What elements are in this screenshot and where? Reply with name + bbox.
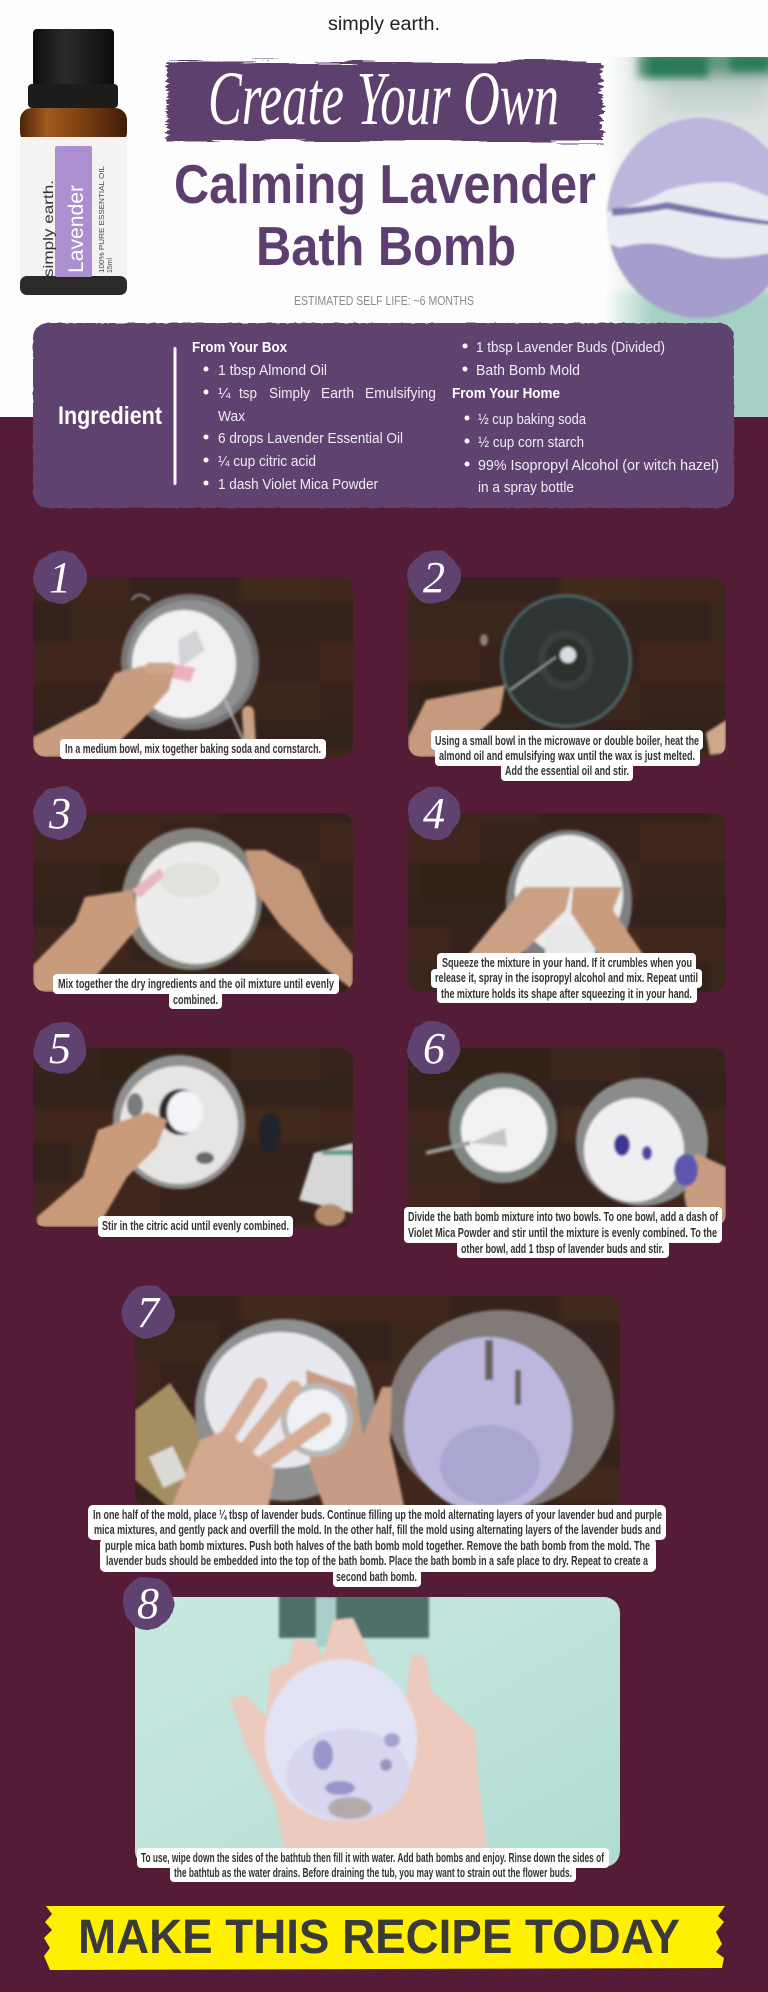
list: from your home: 99% Isopropyl Alcohol (or witch hazel) bbox=[478, 457, 719, 474]
call to action banner: MAKE THIS RECIPE TODAY bbox=[78, 1911, 680, 1964]
list: from your home bbox=[452, 385, 719, 496]
step 5 bbox=[23, 1022, 363, 1237]
caption 5: Stir in the citric acid until evenly combined. bbox=[102, 1219, 289, 1233]
heading: Calming Lavender Bath Bomb bbox=[174, 153, 596, 277]
caption 5 bbox=[98, 1216, 293, 1237]
caption 3: Mix together the dry ingredients and the oil mixture until evenly bbox=[58, 977, 334, 991]
step 4 bbox=[398, 786, 736, 1003]
number badge 6 bbox=[408, 1022, 460, 1074]
heading: Calming Lavender Bath Bomb: Calming Lavender bbox=[174, 153, 596, 215]
list: from your home: in a spray bottle bbox=[478, 479, 574, 496]
heading: Calming Lavender Bath Bomb: Bath Bomb bbox=[256, 215, 516, 277]
icon: lavender essential oil bottle: 15ml bbox=[105, 258, 114, 273]
icon: lavender essential oil bottle: Lavender bbox=[65, 185, 88, 273]
caption 7: second bath bomb. bbox=[336, 1570, 417, 1584]
step 7 bbox=[88, 1286, 666, 1587]
caption 6 bbox=[404, 1207, 722, 1258]
caption 8 bbox=[137, 1848, 609, 1882]
shelf life note: ESTIMATED SELF LIFE: ~6 MONTHS bbox=[294, 294, 474, 308]
list: from your box: ¼ bbox=[218, 385, 231, 402]
list: from your box: 1 tbsp Lavender Buds (Divided) bbox=[476, 339, 665, 356]
number badge 7 bbox=[122, 1286, 174, 1338]
photo: squeezing the mixture bbox=[408, 813, 726, 992]
caption 1 bbox=[60, 739, 326, 759]
title banner: Create Your Own bbox=[167, 57, 602, 141]
list: from your box: From Your Box bbox=[192, 339, 288, 356]
list: from your box bbox=[192, 339, 665, 493]
photo: bath bomb on towel bbox=[606, 57, 768, 417]
number badge 8 bbox=[122, 1576, 174, 1630]
list: from your home: From Your Home bbox=[452, 385, 560, 402]
caption 3 bbox=[53, 974, 339, 1009]
number badge 8: 8 bbox=[137, 1579, 159, 1628]
header white background bbox=[0, 0, 768, 417]
list: from your box: ¼ cup citric acid bbox=[218, 453, 316, 470]
caption 2: Add the essential oil and stir. bbox=[505, 764, 629, 778]
icon: lavender essential oil bottle: 100% PURE ESSENTIAL OIL bbox=[97, 166, 106, 273]
list: from your box: Simply bbox=[269, 385, 310, 402]
photo: heating oil and wax in glass bowl bbox=[408, 577, 726, 757]
list: from your home: ½ cup corn starch bbox=[478, 434, 584, 451]
step 6 bbox=[398, 1022, 736, 1258]
number badge 2: 2 bbox=[423, 553, 445, 602]
photo: stirring in citric acid bbox=[33, 1048, 353, 1227]
list: from your box: tsp bbox=[239, 385, 257, 402]
title banner: Create Your Own: Create Your Own bbox=[208, 57, 559, 141]
step 3 bbox=[23, 786, 363, 1009]
logo: simply earth: simply earth. bbox=[328, 14, 440, 35]
number badge 7: 7 bbox=[137, 1288, 161, 1337]
number badge 5: 5 bbox=[49, 1024, 71, 1073]
number badge 6: 6 bbox=[423, 1024, 445, 1073]
list: from your home: ½ cup baking soda bbox=[478, 411, 587, 428]
photo: two bowls, whisk and mica powder bbox=[408, 1048, 726, 1224]
list: from your box: 1 dash Violet Mica Powder bbox=[218, 476, 378, 493]
list: from your box: Wax bbox=[218, 408, 245, 425]
photo: filling the mold bbox=[135, 1296, 620, 1505]
step 1 bbox=[23, 550, 363, 767]
number badge 1: 1 bbox=[49, 553, 71, 602]
caption 2 bbox=[431, 730, 703, 781]
step 2 bbox=[398, 550, 736, 781]
number badge 2 bbox=[408, 550, 460, 604]
icon: lavender essential oil bottle bbox=[20, 29, 127, 295]
number badge 5 bbox=[34, 1022, 86, 1074]
caption 8: the bathtub as the water drains. Before draining the tub, you may want to strain out the flower buds. bbox=[174, 1866, 572, 1880]
panel: ingredients bbox=[33, 323, 734, 508]
list: from your box: 6 drops Lavender Essential Oil bbox=[218, 430, 403, 447]
number badge 3 bbox=[34, 786, 86, 840]
photo: mixing powder in bowl bbox=[33, 577, 353, 757]
number badge 4: 4 bbox=[423, 789, 445, 838]
list: from your box: Earth bbox=[321, 385, 354, 402]
list: from your box: Bath Bomb Mold bbox=[476, 362, 580, 379]
number badge 1 bbox=[34, 550, 86, 604]
caption 3: combined. bbox=[173, 993, 218, 1007]
caption 1: In a medium bowl, mix together baking soda and cornstarch. bbox=[65, 742, 321, 756]
caption 4 bbox=[431, 953, 702, 1003]
icon: lavender essential oil bottle: simply earth. bbox=[40, 180, 56, 277]
ingredients label: Ingredient bbox=[58, 402, 163, 430]
step 8 bbox=[122, 1576, 620, 1882]
list: from your box: Emulsifying bbox=[365, 385, 436, 402]
number badge 3: 3 bbox=[48, 789, 71, 838]
list: from your box: 1 tbsp Almond Oil bbox=[218, 362, 327, 379]
number badge 4 bbox=[408, 786, 460, 840]
photo: mixing dry ingredients and oil bbox=[33, 813, 353, 992]
photo: fizzing bath bomb in hand bbox=[135, 1590, 620, 1870]
caption 6: other bowl, add 1 tbsp of lavender buds and stir. bbox=[461, 1242, 664, 1256]
caption 7 bbox=[88, 1505, 666, 1587]
